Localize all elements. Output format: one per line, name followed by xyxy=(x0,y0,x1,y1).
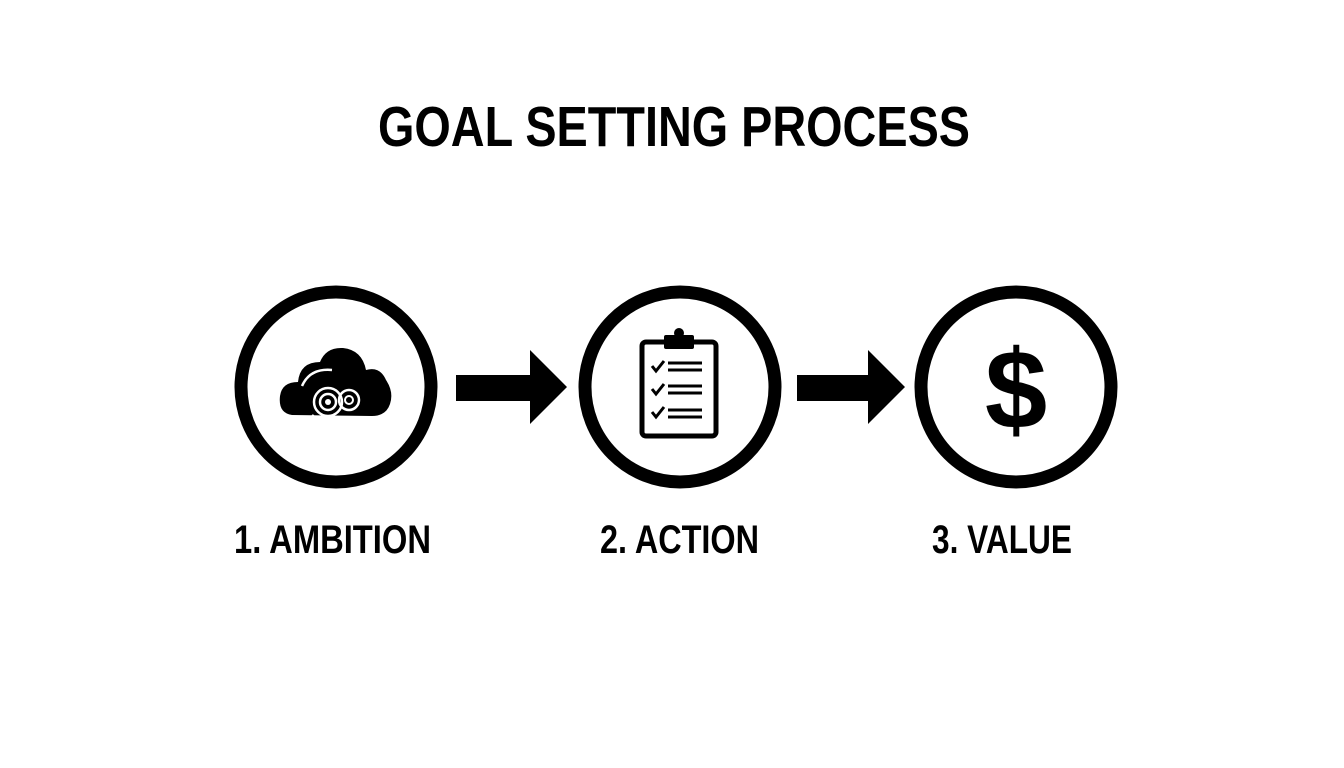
label 1: 1. AMBITION xyxy=(234,518,431,562)
circle 1 xyxy=(241,292,431,482)
step 2: action xyxy=(585,292,775,482)
label 3: 3. VALUE xyxy=(932,518,1072,562)
circle 2 xyxy=(585,292,775,482)
icon: dollar sign: $ xyxy=(985,327,1047,452)
step 3: value xyxy=(921,292,1111,482)
step 1: ambition xyxy=(241,292,431,482)
title: GOAL SETTING PROCESS xyxy=(378,95,970,159)
arrow 1 xyxy=(456,350,567,424)
arrow 2 xyxy=(797,350,905,424)
circle 3 xyxy=(921,292,1111,482)
icon: clipboard checklist xyxy=(642,328,716,436)
icon: cloud with swirls xyxy=(280,348,391,423)
label 2: 2. ACTION xyxy=(600,518,759,562)
